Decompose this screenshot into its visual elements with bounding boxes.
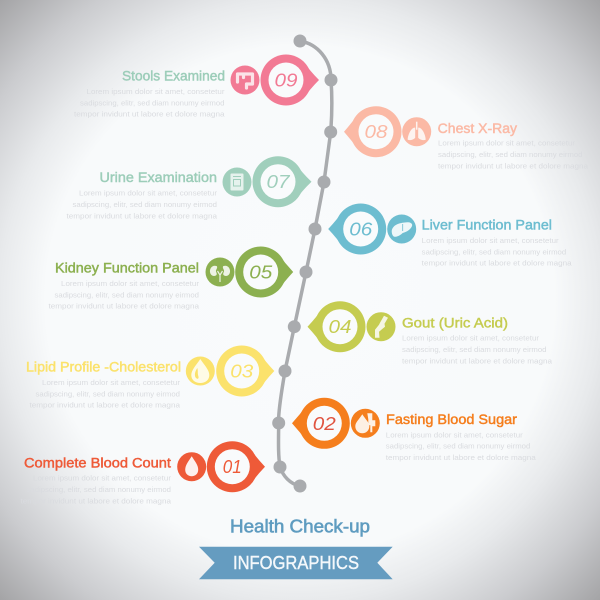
pin 08 [344,106,402,157]
ribbon banner: INFOGRAPHICS [233,552,359,573]
heading: Fasting Blood Sugar [386,412,518,427]
heading: Stools Examined [122,68,225,84]
icon: blood drop and sugar cubes [351,409,380,438]
text block: tempor invidunt ut labore et dolore magna [386,453,537,462]
icon: lungs [402,117,431,146]
text block: sadipscing, elitr, sed diam nonumy eirmod [26,485,171,494]
text block [402,334,553,365]
pin 02 [292,398,350,449]
heading: Chest X-Ray [438,121,517,136]
icon: liver [387,214,416,244]
text block: Lorem ipsum dolor sit amet, consetetur [79,189,218,198]
icon: kidneys [206,258,234,286]
icon: joint bone [366,312,396,341]
icon: blood drop [177,452,206,481]
text block [20,474,172,505]
text block: Lorem ipsum dolor sit amet, consetetur [42,378,181,387]
text block: sadipscing, elitr, sed diam nonumy eirmod [386,442,530,451]
pin 08: 08 [364,122,387,142]
panel: 07 urine examination [66,156,312,220]
heading: Liver Function Panel [422,218,552,232]
pin 04 [308,301,366,352]
pin 09 [260,54,319,106]
icon: clipboard [222,168,252,196]
heading: Lipid Profile -Cholesterol [26,360,181,374]
text block [74,87,225,119]
heading: Complete Blood Count [24,456,171,470]
text block [422,236,573,268]
text block [438,139,589,170]
text block: tempor invidunt ut labore et dolore magna [422,259,573,268]
text block: tempor invidunt ut labore et dolore magna [66,211,218,220]
text block: tempor invidunt ut labore et dolore magna [20,496,172,505]
text block: sadipscing, elitr, sed diam nonumy eirmod [36,389,180,398]
panel: 05 kidney function panel [48,246,293,311]
title: Health Check-up [230,516,370,536]
text block: tempor invidunt ut labore et dolore magna [30,401,181,410]
text block: tempor invidunt ut labore et dolore magna [438,161,589,170]
text block: Lorem ipsum dolor sit amet, consetetur [86,87,225,96]
icon: intestines [230,66,260,94]
panel: 09 stools examined [74,54,319,119]
text block [66,189,218,220]
text block: Lorem ipsum dolor sit amet, consetetur [386,430,523,439]
heading: Urine Examination [100,170,217,185]
heading: Kidney Function Panel [55,260,199,276]
panel: 03 lipid profile [26,346,274,410]
text block: tempor invidunt ut labore et dolore magna [74,110,225,119]
text block: sadipscing, elitr, sed diam nonumy eirmod [402,345,546,354]
pin 07 [252,156,312,207]
pin 02: 02 [313,414,336,434]
text block: sadipscing, elitr, sed diam nonumy eirmod [54,290,199,299]
pin 07: 07 [266,172,291,192]
pin 04: 04 [328,317,351,337]
pin 01 [207,441,265,492]
text block: Lorem ipsum dolor sit amet, consetetur [422,236,559,245]
text block: Lorem ipsum dolor sit amet, consetetur [438,139,576,148]
icon: fat drop [186,356,215,386]
panel: 01 complete blood count [20,441,265,505]
text block: sadipscing, elitr, sed diam nonumy eirmod [422,247,566,256]
text block: Lorem ipsum dolor sit amet, consetetur [61,279,200,288]
pin 03 [216,346,274,396]
text block: Lorem ipsum dolor sit amet, consetetur [402,334,540,343]
pin 03: 03 [230,362,253,382]
pin 06: 06 [349,220,373,240]
panel: 02 fasting blood sugar [292,398,537,462]
text block [30,378,181,410]
pin 01: 01 [223,457,242,477]
panel: 06 liver function panel [328,204,573,268]
text block [386,430,537,462]
text block: sadipscing, elitr, sed diam nonumy eirmod [80,98,224,107]
pin 06 [328,204,386,254]
heading: Gout (Uric Acid) [402,316,508,330]
timeline spine [272,34,338,492]
pin 09: 09 [274,70,297,90]
text block: Lorem ipsum dolor sit amet, consetetur [33,474,172,483]
pin 05 [235,246,293,298]
panel: 04 gout [308,301,553,365]
text block: sadipscing, elitr, sed diam nonumy eirmod [438,150,582,159]
text block: tempor invidunt ut labore et dolore magna [402,356,553,365]
pin 05: 05 [249,262,273,282]
text block: tempor invidunt ut labore et dolore magna [48,302,200,311]
text block: sadipscing, elitr, sed diam nonumy eirmod [72,200,217,209]
panel: 08 chest x-ray [344,106,589,170]
ribbon banner [199,547,393,579]
text block [48,279,200,311]
